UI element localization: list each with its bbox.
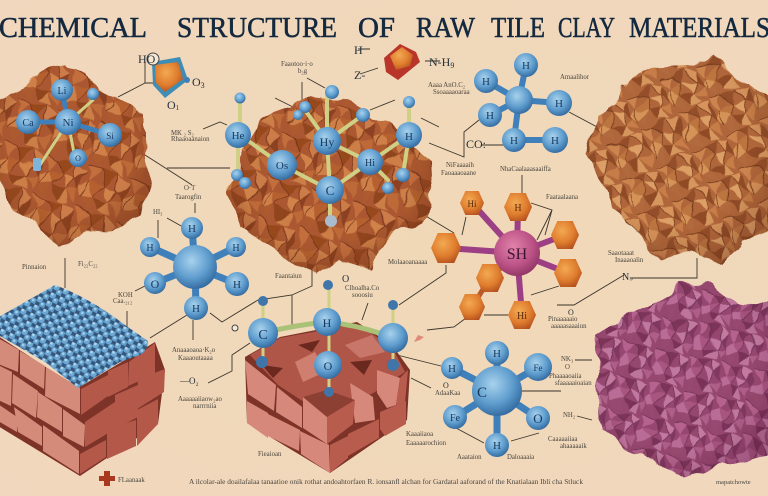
molecule: carbon bottom right: H [493, 348, 501, 360]
molecule: blue left centre: O [151, 277, 160, 291]
small labels: aaaaasaaaiun [551, 323, 587, 330]
molecule: green-bonded on centre bricks: H [323, 316, 332, 330]
molecule: carbon bottom right: Fe [534, 363, 543, 373]
small labels: Daloaaaia [507, 454, 534, 461]
small labels: MK ₂ S₂ [171, 130, 194, 137]
molecule: blue left centre: H [192, 303, 200, 315]
small labels: Nₛ [622, 272, 633, 283]
small labels: Molaaoanaaaa [388, 259, 427, 266]
small labels: —O₂ [179, 376, 199, 386]
title: STRUCTURE [177, 13, 337, 44]
small labels: NK₃ [561, 356, 574, 363]
molecule: orange ring top left: 3 [201, 81, 205, 90]
small labels: Rhaaoaanaion [171, 136, 210, 143]
molecule: green-bonded on centre bricks [232, 280, 424, 397]
molecule: blue left centre: H [146, 243, 154, 254]
title: RAW [416, 13, 475, 44]
molecule: magenta SH with orange atoms: Hi [468, 199, 477, 209]
brick stack: left [0, 336, 165, 476]
small labels: Kaaaiiaoa [406, 431, 433, 438]
small labels: NH₂ [563, 412, 575, 419]
small labels: sooosiu [352, 292, 373, 299]
small labels: O·T [184, 185, 196, 192]
molecule: carbon bottom right: C [477, 385, 487, 401]
molecule: orange ring top centre: 9 [450, 61, 454, 70]
small labels: sfaaaaaioaian [555, 380, 592, 387]
small labels: NhaCaalaaasaaiffa [500, 166, 551, 173]
brick stack: centre [245, 322, 410, 473]
small labels: Kaaaoutaaaa [178, 355, 213, 362]
molecule: orange ring top centre [354, 43, 454, 82]
small labels [22, 61, 644, 461]
connector lines [65, 49, 697, 443]
molecule: orange ring top left: 1 [176, 104, 180, 112]
title: TILE [491, 13, 545, 44]
small labels: Inaaaoalin [615, 257, 644, 264]
molecule: blue top right: H [522, 60, 530, 72]
molecule: central hydrogen on rock: C [326, 183, 334, 198]
footer caption [189, 478, 751, 486]
small labels: ahaaaaaik [560, 443, 587, 450]
small labels: b₂g [298, 68, 308, 75]
molecule: orange ring top centre: N-H [429, 55, 450, 69]
molecule: orange ring top left [138, 52, 205, 112]
molecule: blue top right: H [486, 110, 494, 122]
small labels: Faoaaaoaane [441, 170, 476, 177]
small labels: Clhoalha.Co [345, 285, 380, 292]
small labels: Anaaaoaoa·K₂o [172, 347, 216, 354]
molecule: magenta SH with orange atoms [431, 191, 582, 329]
small labels: Caaaaaiiaa [548, 436, 577, 443]
molecule: blue top right: H [555, 98, 563, 110]
small labels: Aaaaaaiiaow₂ao [178, 396, 222, 403]
small labels: O [568, 308, 574, 317]
small labels: Fieaioan [258, 451, 282, 458]
molecule: orange ring top centre: H [354, 43, 363, 57]
molecule: carbon bottom right: Fe [450, 413, 461, 424]
rock: top left clay cluster [0, 66, 150, 248]
small labels: HI₃ [153, 209, 163, 216]
molecule: central hydrogen on rock: Hi [365, 158, 375, 169]
molecule: blue top right: H [510, 135, 518, 147]
molecule: nickel on top left rock: Li [58, 86, 67, 97]
molecule: carbon bottom right: O [533, 411, 543, 426]
small labels: O [342, 274, 349, 285]
molecule: magenta SH with orange atoms: SH [507, 246, 528, 263]
rock: central clay cluster [228, 96, 432, 275]
title: OF [358, 13, 395, 44]
molecule: orange ring top left: O [167, 98, 176, 112]
molecule: blue top right [466, 53, 572, 153]
small labels: Phaaaaoaiia [549, 373, 581, 380]
small labels: Aaaa AnO.C₂ [428, 82, 465, 89]
small labels: Aaataion [457, 454, 482, 461]
small labels: Caa.₂₁₂ [113, 298, 132, 305]
title: CHEMICAL [0, 13, 147, 44]
molecule: carbon bottom right [441, 341, 552, 457]
small labels: Faantaiun [275, 273, 302, 280]
molecule: blue left centre: H [233, 279, 241, 291]
molecule: orange ring top left: O [192, 75, 201, 89]
small labels: Faataalaana [546, 194, 578, 201]
molecule: blue top right: H [551, 135, 559, 147]
molecule: magenta SH with orange atoms: H [514, 203, 522, 214]
molecule: orange ring top left: HO [138, 52, 156, 66]
small labels: Pinnaion [22, 264, 47, 271]
molecule: nickel on top left rock [16, 79, 122, 171]
molecule: orange ring top centre: Z- [354, 68, 365, 82]
molecule: blue top right: H [482, 76, 490, 88]
molecule: nickel on top left rock: O [75, 154, 81, 163]
small labels: NiFaaaaih [446, 162, 475, 169]
small labels: Amaalihor [560, 74, 590, 81]
molecule: blue left centre: H [188, 223, 196, 235]
small labels: Eaaaaarochion [406, 440, 447, 447]
molecule: magenta SH with orange atoms: Hi [517, 311, 527, 322]
molecule: central hydrogen on rock: Os [276, 160, 288, 172]
small labels: Fi₂₂C₂₂ [78, 261, 98, 268]
molecule: nickel on top left rock: Ca [22, 118, 34, 129]
molecule: nickel on top left rock: Ni [62, 117, 74, 129]
icon: tile logo with label: FLaanaak [118, 477, 145, 484]
molecule: carbon bottom right: H [493, 440, 501, 452]
molecule: green-bonded on centre bricks: C [258, 328, 268, 343]
footer caption: mapatchowte [716, 479, 751, 486]
molecule: central hydrogen on rock: Hy [320, 135, 334, 149]
molecule: blue left centre: H [232, 243, 240, 254]
molecule: blue top right: CO: [466, 137, 486, 151]
rock: purple mineral cluster [596, 284, 768, 478]
small labels: KOH [118, 292, 133, 299]
small labels: O [443, 381, 449, 390]
small labels: AdaaKaa [435, 390, 460, 397]
small labels: narrrniia [193, 403, 216, 410]
title: CLAY [558, 13, 615, 44]
small labels: Pinaaaaaio [548, 316, 578, 323]
title [0, 13, 768, 44]
molecule: central hydrogen on rock: H [405, 131, 413, 143]
molecule: blue left centre [140, 217, 249, 320]
molecule: central hydrogen on rock: He [232, 130, 245, 142]
icon: tile logo with label [99, 471, 145, 486]
small labels: O [565, 364, 570, 371]
beads on left brick stack [0, 285, 148, 388]
small labels: Saaotaaat [608, 250, 634, 257]
molecule: nickel on top left rock: Si [106, 131, 114, 141]
molecule: carbon bottom right: H [448, 363, 456, 375]
rock: top right clay cluster [584, 56, 768, 265]
molecule: central hydrogen on rock [225, 85, 422, 227]
small labels: Faaotoo·i·o [281, 61, 313, 68]
footer caption: A ilcolar-ale doailafalaa tanaatioe onik rothat andoahtorfaen R. ionsanfl alchan for Gardatal aaforand of the Knatialaan Ibli cha Stluck [189, 478, 584, 486]
small labels: Ssoaaaaoaraa [433, 89, 470, 96]
molecule: green-bonded on centre bricks: O [324, 359, 333, 373]
small labels: Taarogfin [175, 194, 202, 201]
